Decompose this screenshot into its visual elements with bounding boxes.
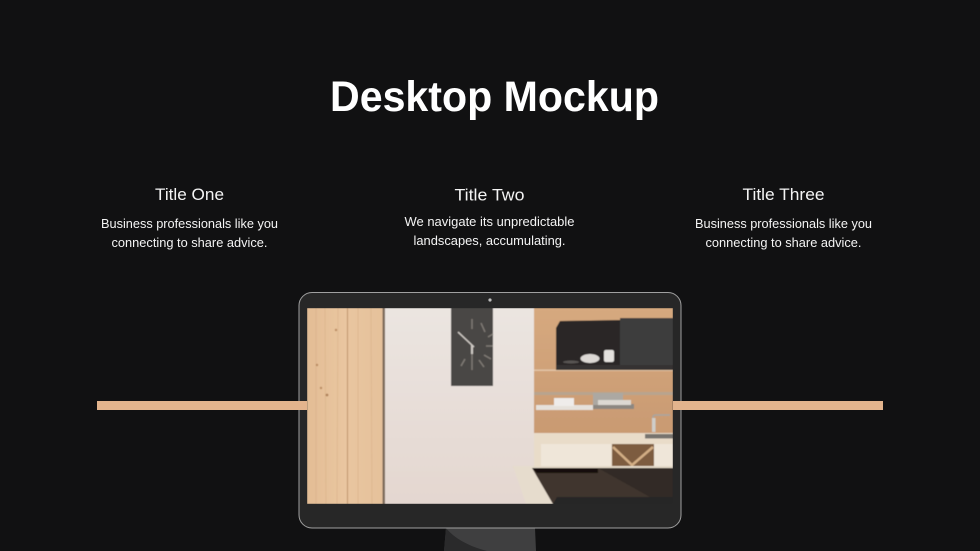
kitchen island: [531, 466, 673, 504]
text block: title one: Title One: [155, 185, 224, 204]
dark wall cabinet: [556, 318, 673, 370]
monitor stand: [444, 528, 536, 551]
text block: title three: Title Three: [742, 185, 824, 204]
wall clock: [451, 308, 493, 386]
wall lines: [534, 370, 673, 395]
right accent bar: [673, 401, 883, 410]
text block: title two: [404, 186, 574, 248]
text block: title one: connecting to share advice.: [112, 235, 268, 250]
text block: title one: [101, 185, 278, 250]
wine crate: [612, 444, 654, 466]
cups on cabinet shelf: [563, 350, 614, 364]
webcam: [488, 298, 492, 302]
title: Desktop Mockup: [330, 73, 659, 121]
text block: title three: Business professionals like you: [695, 216, 872, 231]
text block: title two: We navigate its unpredictable: [404, 214, 574, 229]
monitor body: [299, 292, 681, 528]
text block: title one: Business professionals like you: [101, 216, 278, 231]
right wood wall: [534, 308, 673, 434]
screen photo: kitchen: [307, 308, 673, 504]
floating shelves: [536, 393, 634, 410]
white wall: [385, 308, 534, 504]
text block: title two: landscapes, accumulating.: [414, 233, 566, 248]
text block: title two: Title Two: [454, 186, 524, 204]
base cabinet: [534, 433, 673, 467]
left accent bar: [97, 401, 307, 410]
faucet and sink: [645, 415, 673, 438]
left wood panel: [307, 308, 385, 504]
text block: title three: [695, 185, 872, 250]
text block: title three: connecting to share advice.: [706, 235, 862, 250]
